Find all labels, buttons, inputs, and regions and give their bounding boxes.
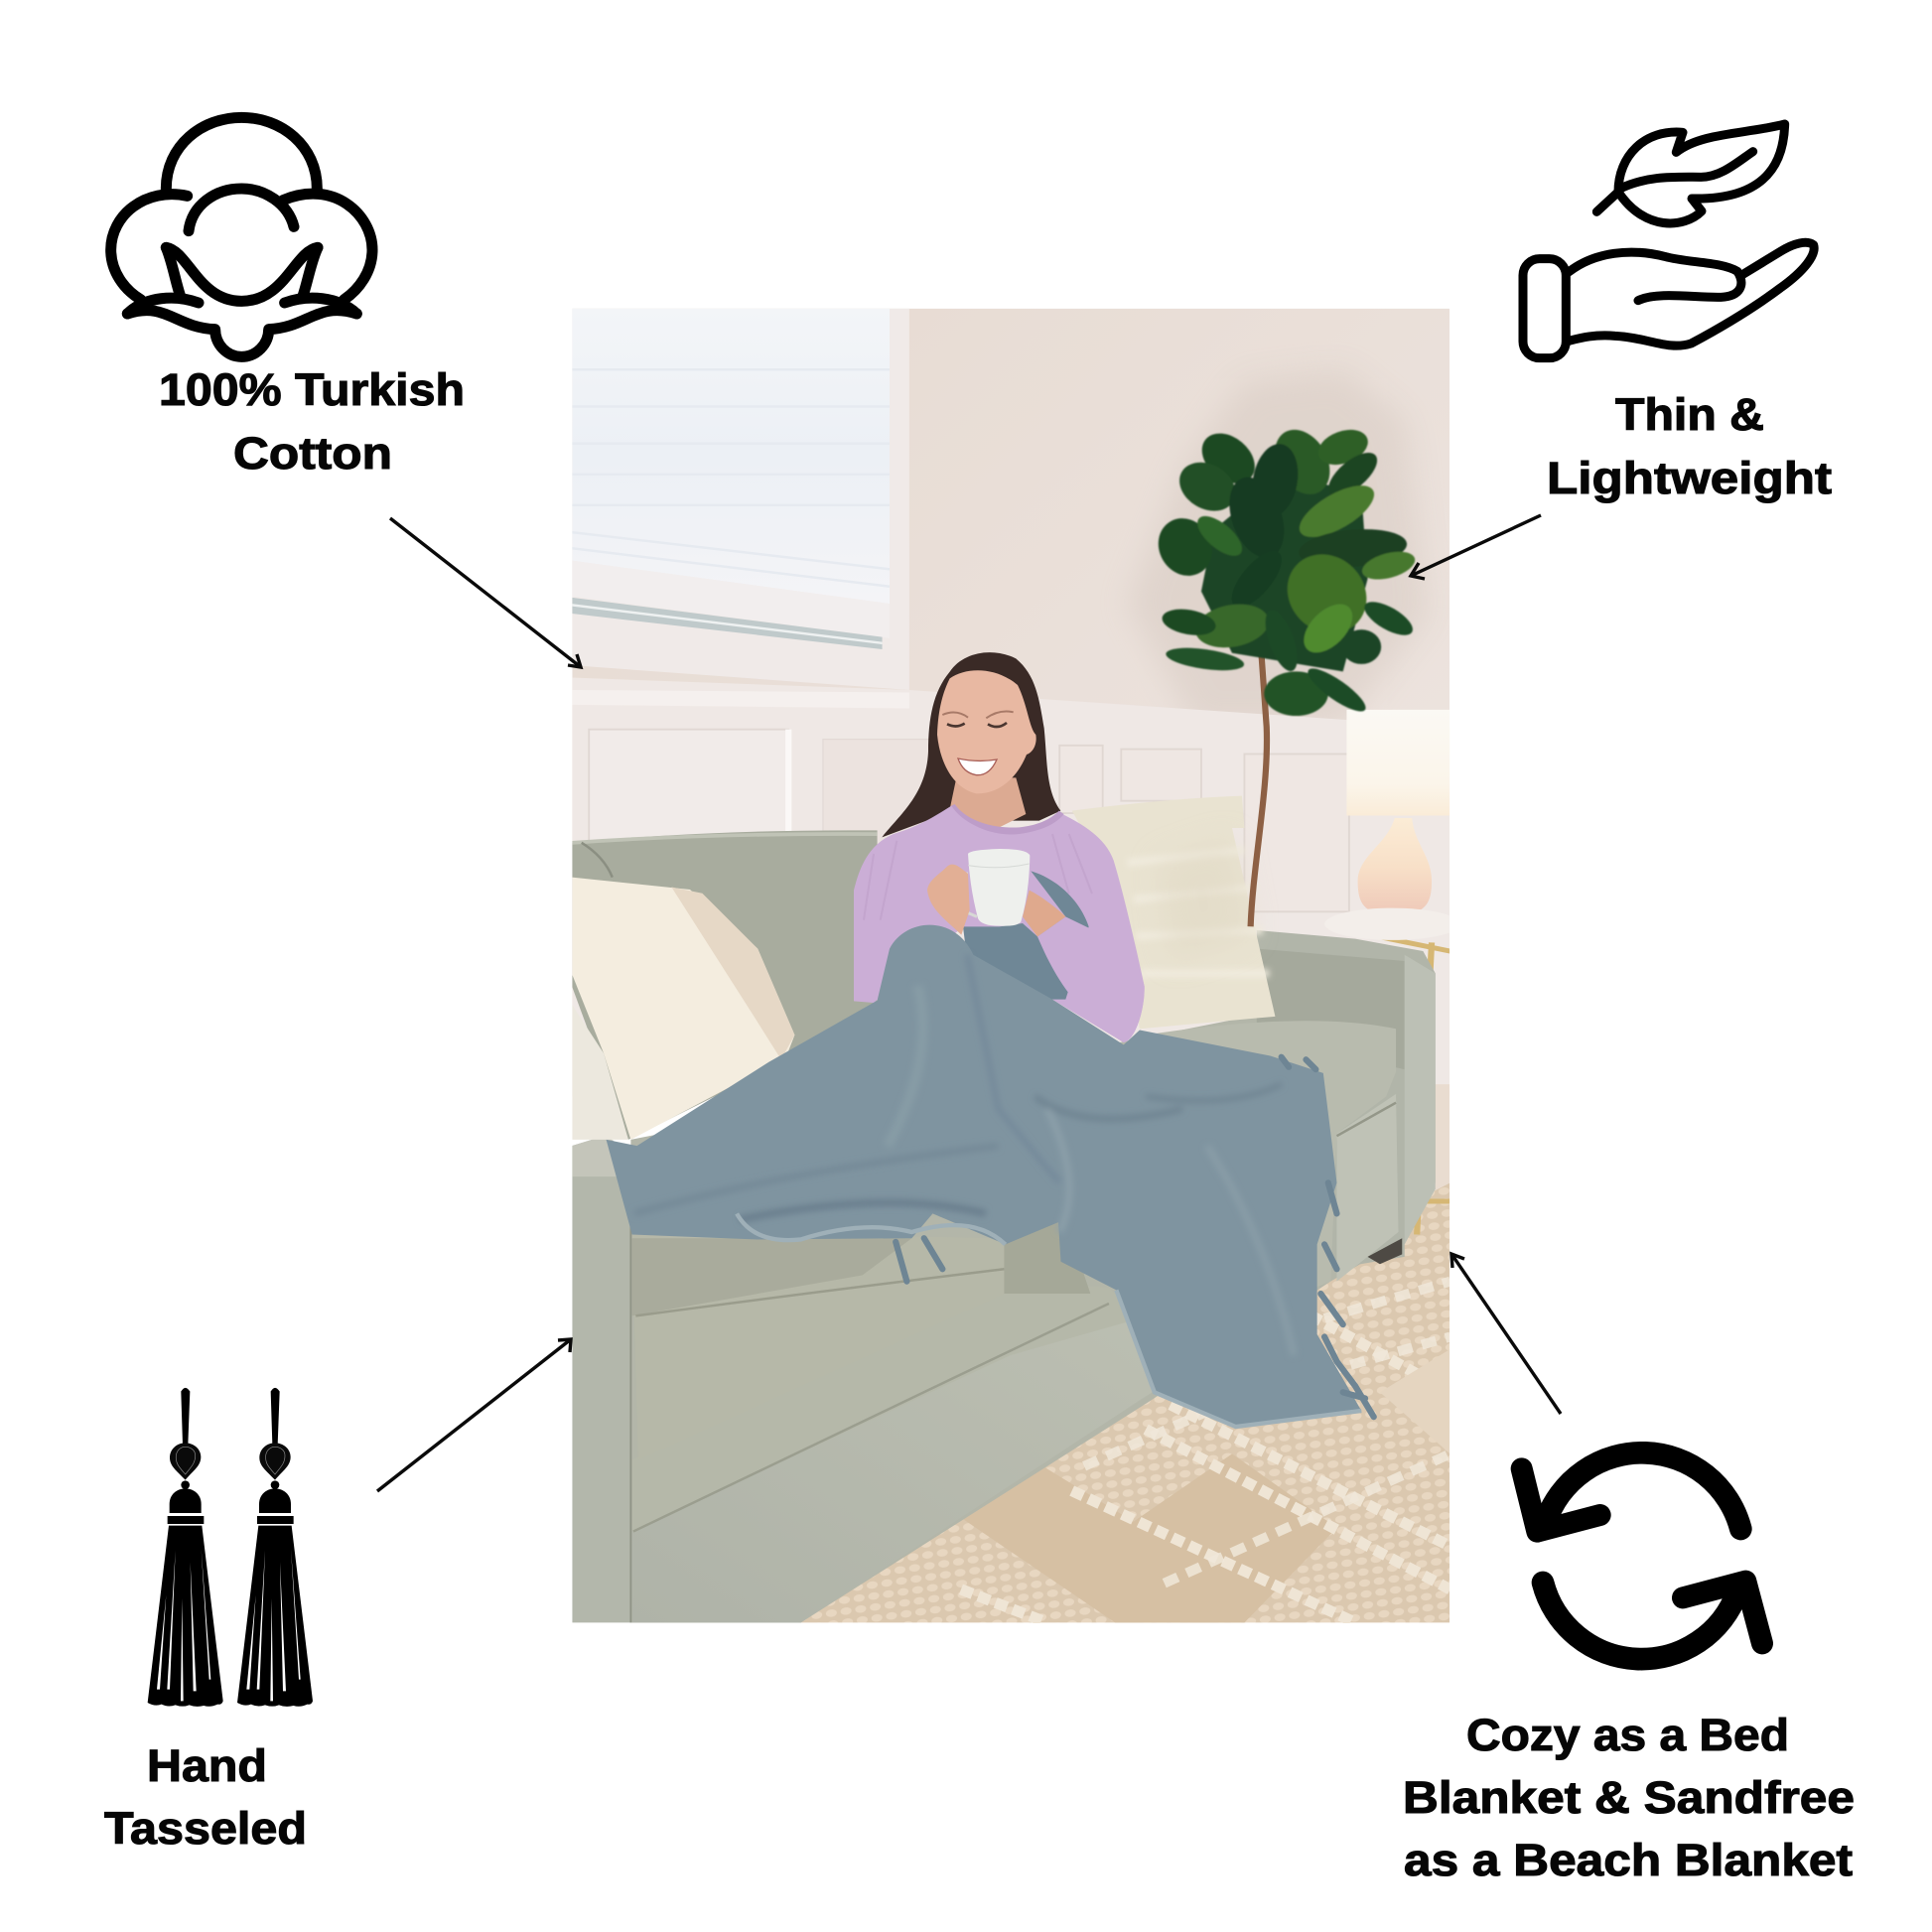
hand holding mug: [927, 865, 970, 935]
wall: [572, 308, 1449, 720]
eyes and brows: [942, 711, 1014, 718]
arrow: cozy to photo: [1451, 1254, 1561, 1414]
sweater: [854, 806, 1145, 1042]
hair: [882, 652, 1060, 837]
smile: [958, 759, 997, 775]
sofa right arm: [1257, 930, 1436, 1282]
neck: [950, 777, 1026, 831]
sofa back: [572, 830, 878, 1140]
pillow right: [1072, 796, 1275, 1029]
seat cushion: [632, 1232, 1011, 1460]
arrow: tassels to photo: [377, 1339, 571, 1491]
label: Hand Tasseled: Hand: [147, 1740, 267, 1791]
arrow: cotton to photo: [390, 518, 581, 667]
label: 100% Turkish Cotton: 100% Turkish: [159, 364, 465, 415]
sofa body backing: [630, 1019, 1360, 1622]
face: [937, 670, 1036, 793]
window frame: [572, 308, 909, 690]
hand holding blanket: [1023, 891, 1065, 936]
blanket: [607, 925, 1374, 1427]
sofa front: [631, 1322, 1128, 1622]
floor: [1434, 1084, 1449, 1191]
plant leaves: [1148, 420, 1418, 718]
label: Hand Tasseled: Tasseled: [104, 1803, 307, 1854]
label: Cozy as a Bed Blanket & Sandfree as a Beach Blanket: Cozy as a Bed: [1466, 1710, 1789, 1760]
icon: two tassels: [148, 1388, 313, 1707]
icon: reversible arrows: [1522, 1452, 1762, 1659]
plant stem: [1247, 656, 1271, 927]
arrow: lightweight to photo: [1411, 515, 1541, 579]
label: Thin & Lightweight: Thin &: [1615, 389, 1764, 440]
lamp: [1346, 710, 1450, 915]
label: Thin & Lightweight: [1547, 389, 1832, 503]
photo: woman on sofa with blanket: [572, 308, 1460, 1622]
window shade: [572, 308, 890, 649]
label: Cozy as a Bed Blanket & Sandfree as a Beach Blanket: Blanket & Sandfree: [1403, 1772, 1855, 1823]
icon: cotton boll: [111, 117, 372, 356]
sofa right seat: [1157, 1021, 1396, 1068]
blanket hem: [737, 1213, 1361, 1427]
label: Hand Tasseled: [104, 1740, 307, 1854]
blanket bunch at chest: [963, 871, 1089, 1000]
blanket tassels: [896, 1057, 1374, 1417]
plant shadow on wall: [1128, 369, 1430, 727]
woman: [854, 652, 1145, 1042]
sofa left arm: [572, 1136, 630, 1622]
side table: [1324, 908, 1460, 1234]
pillows left: [572, 878, 794, 1140]
label: Thin & Lightweight: Lightweight: [1547, 453, 1832, 503]
rug: [798, 1182, 1450, 1622]
label: 100% Turkish Cotton: [159, 364, 465, 479]
label: Cozy as a Bed Blanket & Sandfree as a Beach Blanket: as a Beach Blanket: [1404, 1835, 1853, 1885]
sweater forearm: [1037, 887, 1145, 1042]
blanket folds: [741, 1086, 1277, 1231]
mug: [961, 849, 1030, 926]
label: 100% Turkish Cotton: Cotton: [233, 428, 392, 479]
icon: feather over open hand: [1523, 124, 1814, 358]
label: Cozy as a Bed Blanket & Sandfree as a Beach Blanket: [1403, 1710, 1855, 1885]
wainscot panels: [572, 677, 1350, 1027]
